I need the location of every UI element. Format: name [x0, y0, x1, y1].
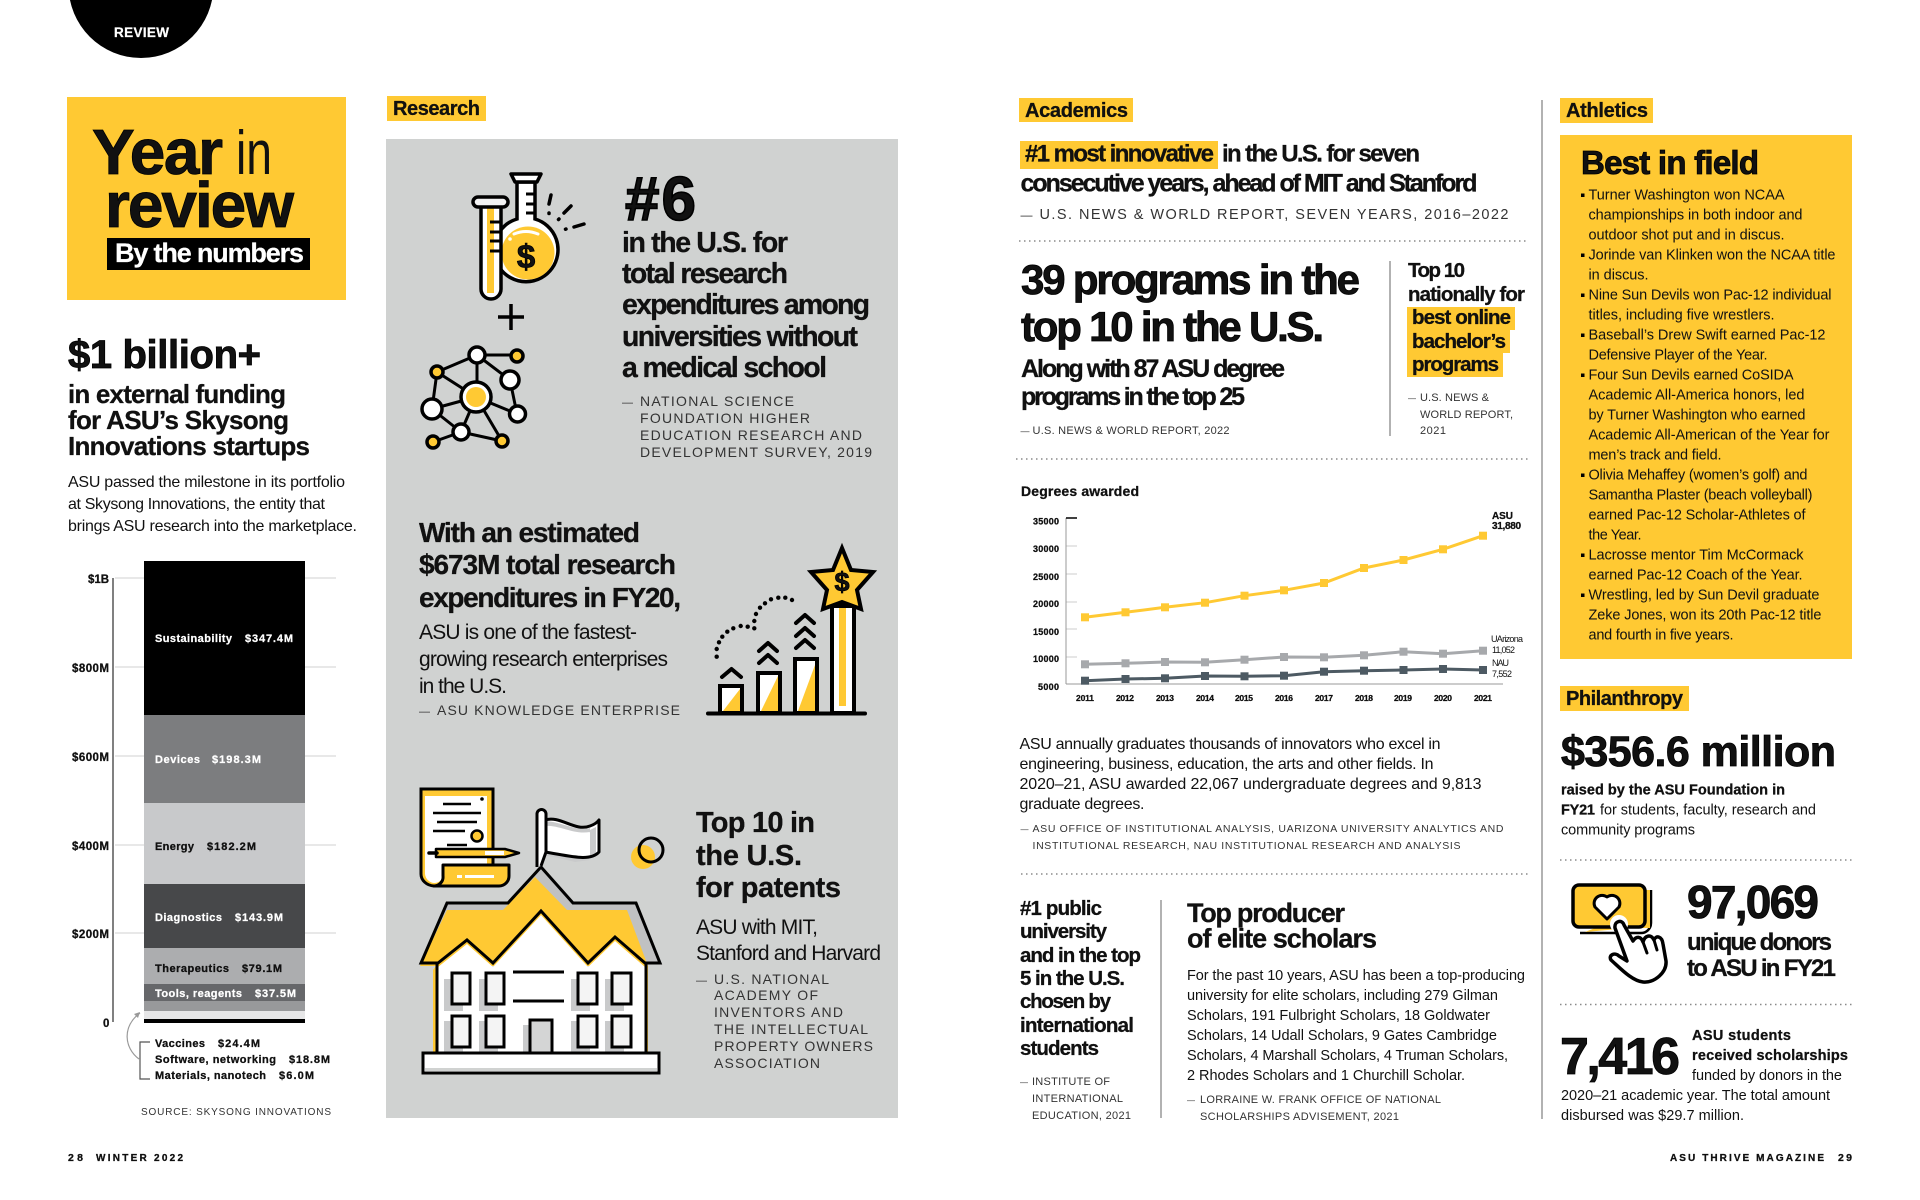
text block: degrees description: engineering, business, education, the arts and other fields. In	[1020, 756, 1434, 773]
stat: top 10 best online programs: programs	[1412, 353, 1499, 376]
stacked bar chart: skysong funding: $600M	[72, 752, 109, 764]
stat: 356.6 million raised: FY21	[1561, 802, 1595, 818]
stacked bar chart: skysong funding: $79.1M	[242, 963, 282, 975]
stat: 356.6 million raised: raised by the ASU Foundation in	[1561, 782, 1785, 798]
citation: national academy of inventors: PROPERTY OWNERS	[714, 1038, 873, 1054]
stat: number one public university	[1020, 897, 1141, 1122]
stat: top producer of elite scholars: Scholars, 4 Marshall Scholars, 4 Truman Scholars,	[1187, 1048, 1508, 1064]
footer: right folio: 29	[1838, 1152, 1852, 1164]
text block: degrees description: 2020–21, ASU awarded 22,067 undergraduate degrees and 9,813	[1020, 776, 1482, 793]
stat: top ten for patents: for patents	[696, 872, 841, 904]
stat: number one public university: and in the top	[1020, 944, 1141, 967]
panel: best in field: earned Pac-12 Coach of the Year.	[1588, 568, 1802, 584]
panel: best in field: Turner Washington won NCAA	[1588, 188, 1785, 204]
stat: 673M research expenditures: ASU is one of the fastest-	[419, 621, 637, 644]
stacked bar chart: skysong funding: Vaccines	[155, 1038, 205, 1050]
stat: top producer of elite scholars: LORRAINE W. FRANK OFFICE OF NATIONAL	[1200, 1094, 1441, 1106]
citation: national academy of inventors	[696, 971, 873, 1071]
citation: national science foundation: FOUNDATION HIGHER	[640, 410, 810, 426]
stat: most innovative: U.S. NEWS & WORLD REPORT, SEVEN YEARS, 2016–2022	[1040, 207, 1508, 223]
stat: number one public university: chosen by	[1020, 990, 1112, 1013]
stacked bar chart: skysong funding: Diagnostics	[155, 912, 222, 924]
line chart: degrees awarded: UArizona	[1491, 634, 1523, 644]
stat: number six in research expenditures: a medical school	[622, 352, 827, 384]
stat: number six in research expenditures: total research	[622, 258, 788, 290]
stat: 39 programs in the top 10: programs in the top 25	[1021, 383, 1245, 411]
line chart: degrees awarded: 20000	[1033, 599, 1059, 609]
panel: best in field: Four Sun Devils earned CoSIDA	[1588, 368, 1794, 384]
line chart: degrees awarded: 15000	[1033, 627, 1059, 637]
stat: 356.6 million raised	[1561, 728, 1836, 838]
footer: left folio	[68, 1152, 183, 1164]
text block: degrees description	[1020, 736, 1504, 852]
stat: top 10 best online programs: Top 10	[1408, 259, 1465, 282]
stat: 673M research expenditures: in the U.S.	[419, 675, 507, 698]
icon: rising bar chart with star: $	[834, 567, 850, 597]
stat: top producer of elite scholars: Top producer	[1187, 898, 1345, 928]
stacked bar chart: skysong funding: $182.2M	[207, 841, 256, 853]
citation: national academy of inventors: U.S. NATIONAL	[714, 971, 829, 987]
line chart: degrees awarded: 2011	[1076, 693, 1094, 703]
line chart: degrees awarded: 2018	[1355, 693, 1373, 703]
stacked bar chart: skysong funding: $198.3M	[212, 754, 261, 766]
stacked bar chart: skysong funding: $347.4M	[245, 633, 293, 645]
stat: number one public university: university	[1020, 920, 1108, 943]
stacked bar chart: skysong funding	[72, 561, 336, 1118]
stacked bar chart: skysong funding: $1B	[88, 574, 109, 586]
citation: national academy of inventors: —	[696, 975, 707, 987]
panel: best in field: Wrestling, led by Sun Devil graduate	[1588, 588, 1820, 604]
stat: 356.6 million raised: $356.6 million	[1561, 728, 1836, 776]
stat: 39 programs in the top 10: top 10 in the U.S.	[1021, 303, 1324, 350]
stat: 97,069 unique donors: unique donors	[1687, 929, 1832, 956]
text block: degrees description: ASU OFFICE OF INSTITUTIONAL ANALYSIS, UARIZONA UNIVERSITY ANALYTICS AND	[1032, 823, 1504, 835]
stat: 673M research expenditures: ASU KNOWLEDGE ENTERPRISE	[437, 702, 680, 718]
stacked bar chart: skysong funding: Therapeutics	[155, 963, 229, 975]
stacked bar chart: skysong funding: Tools, reagents	[155, 988, 242, 1000]
citation: national science foundation	[622, 393, 872, 460]
stat: top ten for patents: Top 10 in	[696, 807, 815, 839]
panel: best in field: men’s track and field.	[1588, 448, 1722, 464]
stat: 39 programs in the top 10: —	[1020, 426, 1030, 436]
line chart: degrees awarded: ASU	[1492, 511, 1513, 522]
citation: national science foundation: NATIONAL SCIENCE	[640, 393, 794, 409]
footer: right folio: ASU THRIVE MAGAZINE	[1670, 1153, 1824, 1164]
stat: top producer of elite scholars: university for elite scholars, including 279 Gilman	[1187, 988, 1498, 1004]
panel: best in field: Academic All-America honors, led	[1588, 388, 1804, 404]
panel: best in field: Samantha Plaster (beach volleyball)	[1588, 488, 1812, 504]
stat: number one public university: #1 public	[1020, 897, 1102, 920]
icon: rising bar chart with star	[708, 548, 873, 714]
stat: number one public university: 5 in the U.S.	[1020, 967, 1125, 990]
stat: top 10 best online programs: WORLD REPORT,	[1420, 409, 1513, 421]
panel: best in field: Lacrosse mentor Tim McCormack	[1588, 548, 1804, 564]
stat: most innovative: —	[1020, 208, 1032, 222]
section badge: review	[68, 0, 214, 58]
stat: one billion in external funding: $1 billion+	[68, 333, 261, 377]
stat: top 10 best online programs	[1407, 259, 1525, 437]
panel: best in field: titles, including five wrestlers.	[1588, 308, 1774, 324]
stat: most innovative: consecutive years, ahead of MIT and Stanford	[1020, 170, 1478, 198]
stacked bar chart: skysong funding: Energy	[155, 841, 195, 853]
stat: top producer of elite scholars: 2 Rhodes Scholars and 1 Churchill Scholar.	[1187, 1068, 1465, 1084]
stat: top producer of elite scholars: SCHOLARSHIPS ADVISEMENT, 2021	[1200, 1111, 1399, 1123]
footer: left folio: 28	[68, 1152, 83, 1164]
icon: flask and test tube with dollar: $	[517, 238, 535, 275]
stat: 97,069 unique donors: to ASU in FY21	[1687, 955, 1836, 982]
section tag: athletics: Athletics	[1566, 100, 1648, 122]
stacked bar chart: skysong funding: 0	[103, 1018, 109, 1030]
panel: best in field: outdoor shot put and in discus.	[1588, 228, 1784, 244]
stat: top ten for patents	[696, 807, 881, 965]
panel: best in field: Olivia Mehaffey (women’s golf) and	[1588, 468, 1808, 484]
stat: 39 programs in the top 10: Along with 87 ASU degree	[1021, 355, 1285, 383]
panel: research	[386, 139, 898, 1118]
stacked bar chart: skysong funding: $24.4M	[218, 1038, 260, 1050]
text block: skysong description: brings ASU research into the marketplace.	[68, 518, 357, 535]
stat: 39 programs in the top 10	[1020, 256, 1360, 437]
line chart: degrees awarded: 35000	[1033, 516, 1059, 526]
panel: best in field: Academic All-American of the Year for	[1588, 428, 1830, 444]
text block: degrees description: ASU annually graduates thousands of innovators who excel in	[1020, 736, 1440, 753]
icon: flask and test tube with dollar	[473, 174, 584, 299]
panel: best in field: and fourth in five years.	[1588, 628, 1734, 644]
stacked bar chart: skysong funding: $200M	[72, 929, 109, 941]
stacked bar chart: skysong funding: Sustainability	[155, 633, 233, 645]
citation: national academy of inventors: ASSOCIATION	[714, 1055, 820, 1071]
panel: best in field: championships in both indoor and	[1588, 208, 1802, 224]
stat: top producer of elite scholars: of elite scholars	[1187, 924, 1377, 954]
stat: top 10 best online programs: bachelor’s	[1412, 330, 1506, 353]
icon: heart message and pointing hand	[1573, 885, 1666, 982]
stat: 7,416 scholarships: disbursed was $29.7 million.	[1561, 1108, 1744, 1124]
stat: 7,416 scholarships: 2020–21 academic year. The total amount	[1561, 1088, 1830, 1104]
stacked bar chart: skysong funding: Devices	[155, 754, 200, 766]
stat: one billion in external funding: Innovations startups	[68, 431, 310, 461]
stat: top producer of elite scholars: —	[1187, 1096, 1195, 1105]
citation: national science foundation: —	[622, 397, 633, 409]
stat: top ten for patents: Stanford and Harvard	[696, 942, 881, 965]
stat: top ten for patents: ASU with MIT,	[696, 916, 818, 939]
stacked bar chart: skysong funding: $143.9M	[235, 912, 283, 924]
stat: number one public university: —	[1020, 1078, 1028, 1087]
line chart: degrees awarded: 25000	[1033, 572, 1059, 582]
line chart: degrees awarded	[1021, 483, 1523, 703]
stat: 39 programs in the top 10: U.S. NEWS & WORLD REPORT, 2022	[1032, 425, 1230, 437]
stat: most innovative: in the U.S. for seven	[1222, 140, 1420, 168]
stacked bar chart: skysong funding: Software, networking	[155, 1054, 276, 1066]
stat: 7,416 scholarships: funded by donors in the	[1692, 1068, 1842, 1084]
stat: 7,416 scholarships: ASU students	[1692, 1028, 1791, 1044]
stat: 39 programs in the top 10: 39 programs in the	[1021, 256, 1360, 303]
panel: best in field: the Year.	[1588, 528, 1642, 544]
line chart: degrees awarded: 2021	[1474, 693, 1492, 703]
line chart: degrees awarded: 11,052	[1492, 645, 1515, 655]
line chart: degrees awarded: 2014	[1196, 693, 1214, 703]
text block: degrees description: —	[1020, 825, 1028, 834]
icon: network nodes	[422, 347, 526, 448]
line chart: degrees awarded: 2020	[1434, 693, 1452, 703]
icon: yellow dot and ring	[631, 838, 663, 869]
stat: 673M research expenditures	[419, 517, 681, 718]
panel: best in field: Baseball’s Drew Swift earned Pac-12	[1588, 328, 1826, 344]
panel: best in field: Jorinde van Klinken won the NCAA title	[1588, 248, 1836, 264]
title block: year in review: review	[105, 169, 294, 241]
section tag: academics: Academics	[1025, 100, 1128, 122]
stat: top 10 best online programs: —	[1408, 394, 1416, 403]
icon: university building with flag	[420, 810, 660, 1073]
title block: year in review: in	[236, 119, 272, 188]
title block: year in review: By the numbers	[115, 238, 304, 268]
stacked bar chart: skysong funding: SOURCE: SKYSONG INNOVATIONS	[141, 1107, 331, 1118]
stat: number one public university: INTERNATIONAL	[1032, 1093, 1123, 1105]
panel: best in field: Zeke Jones, won its 20th Pac-12 title	[1588, 608, 1822, 624]
text block: skysong description: ASU passed the milestone in its portfolio	[68, 474, 345, 491]
line chart: degrees awarded: 2012	[1116, 693, 1134, 703]
panel: best in field: by Turner Washington who earned	[1588, 408, 1806, 424]
stat: 356.6 million raised: community programs	[1561, 822, 1695, 838]
stacked bar chart: skysong funding: $400M	[72, 841, 109, 853]
title block: year in review	[67, 97, 346, 300]
stacked bar chart: skysong funding: $37.5M	[255, 988, 296, 1000]
stat: top 10 best online programs: 2021	[1420, 425, 1446, 437]
stacked bar chart: skysong funding: $18.8M	[289, 1054, 330, 1066]
icon: patent document with pen	[421, 789, 519, 886]
stat: 673M research expenditures: $673M total research	[419, 549, 676, 580]
text block: skysong description: at Skysong Innovations, the entity that	[68, 496, 326, 513]
section tag: philanthropy: Philanthropy	[1566, 688, 1684, 710]
stat: top producer of elite scholars: For the past 10 years, ASU has been a top-producing	[1187, 968, 1525, 984]
stat: 7,416 scholarships: 7,416	[1560, 1028, 1680, 1086]
title block: year in review: Year	[92, 116, 223, 188]
citation: national academy of inventors: ACADEMY OF	[714, 987, 818, 1003]
stat: number six in research expenditures: universities without	[622, 321, 858, 353]
stat: most innovative: #1 most innovative	[1025, 140, 1214, 168]
stat: top 10 best online programs: best online	[1412, 306, 1511, 329]
panel: best in field: in discus.	[1588, 268, 1648, 284]
line chart: degrees awarded: 2019	[1394, 693, 1412, 703]
panel: best in field: earned Pac-12 Scholar-Athletes of	[1588, 508, 1806, 524]
citation: national academy of inventors: THE INTELLECTUAL	[714, 1021, 868, 1037]
stat: 673M research expenditures: expenditures in FY20,	[419, 582, 681, 613]
stat: 673M research expenditures: growing research enterprises	[419, 648, 668, 671]
stat: top producer of elite scholars: Scholars, 191 Fulbright Scholars, 18 Goldwater	[1187, 1008, 1490, 1024]
text block: skysong description	[68, 474, 357, 535]
stat: most innovative	[1020, 140, 1508, 223]
stat: top 10 best online programs: U.S. NEWS &	[1420, 392, 1490, 404]
stat: number one public university: international	[1020, 1014, 1134, 1037]
stat: one billion in external funding: for ASU’s Skysong	[68, 405, 289, 435]
stat: top ten for patents: the U.S.	[696, 840, 802, 872]
line chart: degrees awarded: 10000	[1033, 654, 1059, 664]
citation: national science foundation: EDUCATION RESEARCH AND	[640, 427, 862, 443]
stat: number one public university: EDUCATION, 2021	[1032, 1110, 1131, 1122]
stat: 97,069 unique donors: 97,069	[1687, 876, 1819, 928]
stat: 356.6 million raised: for students, faculty, research and	[1600, 802, 1816, 818]
stat: 7,416 scholarships	[1560, 1028, 1848, 1124]
stacked bar chart: skysong funding: $800M	[72, 663, 109, 675]
citation: national science foundation: DEVELOPMENT SURVEY, 2019	[640, 444, 872, 460]
line chart: degrees awarded: 2015	[1235, 693, 1253, 703]
panel: best in field: Defensive Player of the Year.	[1588, 348, 1768, 364]
citation: national academy of inventors: INVENTORS AND	[714, 1004, 843, 1020]
stat: 7,416 scholarships: received scholarships	[1692, 1048, 1848, 1064]
line chart: degrees awarded: 31,880	[1492, 521, 1521, 532]
footer: left folio: WINTER 2022	[96, 1153, 183, 1164]
stat: top 10 best online programs: nationally for	[1408, 283, 1525, 306]
stat: 673M research expenditures: With an estimated	[419, 517, 640, 548]
section badge: review: REVIEW	[114, 25, 169, 40]
stat: one billion in external funding: in external funding	[68, 379, 286, 409]
stat: 97,069 unique donors	[1687, 876, 1836, 982]
line chart: degrees awarded: 2016	[1275, 693, 1293, 703]
text block: degrees description: graduate degrees.	[1020, 796, 1144, 813]
stat: one billion in external funding	[68, 333, 310, 461]
stat: top producer of elite scholars	[1187, 898, 1525, 1123]
panel: best in field: Best in field	[1581, 144, 1759, 181]
stat: number one public university: students	[1020, 1037, 1099, 1060]
stacked bar chart: skysong funding: Materials, nanotech	[155, 1070, 266, 1082]
line chart: degrees awarded: 5000	[1038, 682, 1059, 692]
stat: number one public university: INSTITUTE OF	[1032, 1076, 1110, 1088]
stat: number six in research expenditures: expenditures among	[622, 289, 870, 321]
stat: number six in research expenditures	[622, 165, 870, 384]
line chart: degrees awarded: 30000	[1033, 544, 1059, 554]
stacked bar chart: skysong funding: $6.0M	[279, 1070, 314, 1082]
line chart: degrees awarded: NAU	[1492, 658, 1509, 668]
text block: degrees description: INSTITUTIONAL RESEARCH, NAU INSTITUTIONAL RESEARCH AND ANALYSIS	[1032, 840, 1460, 852]
panel: best in field: Nine Sun Devils won Pac-12 individual	[1588, 288, 1832, 304]
line chart: degrees awarded: Degrees awarded	[1021, 483, 1139, 499]
icon: plus sign	[498, 304, 524, 330]
stat: number six in research expenditures: #6	[625, 165, 696, 234]
stat: top producer of elite scholars: Scholars, 14 Udall Scholars, 9 Gates Cambridge	[1187, 1028, 1497, 1044]
line chart: degrees awarded: 7,552	[1492, 669, 1512, 679]
line chart: degrees awarded: 2017	[1315, 693, 1333, 703]
stat: 673M research expenditures: —	[419, 706, 430, 718]
panel: best in field	[1560, 135, 1852, 659]
line chart: degrees awarded: 2013	[1156, 693, 1174, 703]
stat: number six in research expenditures: in the U.S. for	[622, 227, 788, 259]
section tag: research: Research	[393, 98, 480, 120]
